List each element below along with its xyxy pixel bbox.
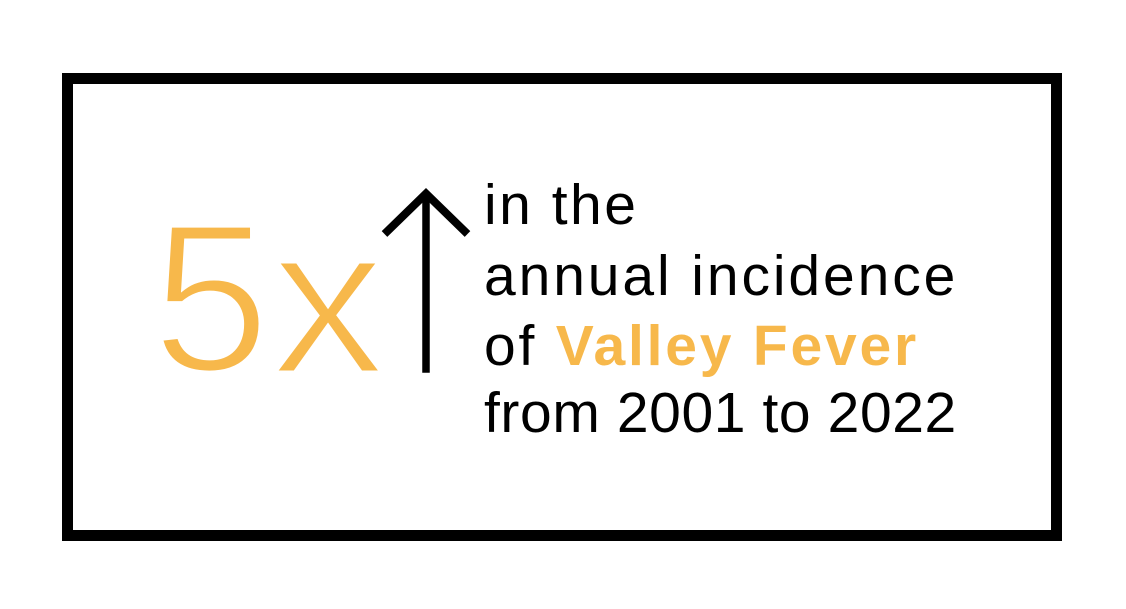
text: of Valley Fever: of Valley Fever bbox=[484, 314, 919, 378]
text: from 2001 to 2022: from 2001 to 2022 bbox=[484, 381, 957, 445]
stat: 5x bbox=[152, 178, 385, 418]
panel: bordered stat box bbox=[62, 73, 1062, 541]
text: annual incidence: annual incidence bbox=[484, 244, 958, 308]
icon: up arrow bbox=[382, 188, 470, 373]
stat: 5x: 5 bbox=[152, 178, 270, 416]
stat: 5x: x bbox=[271, 181, 385, 418]
text: in the: in the bbox=[484, 173, 638, 237]
